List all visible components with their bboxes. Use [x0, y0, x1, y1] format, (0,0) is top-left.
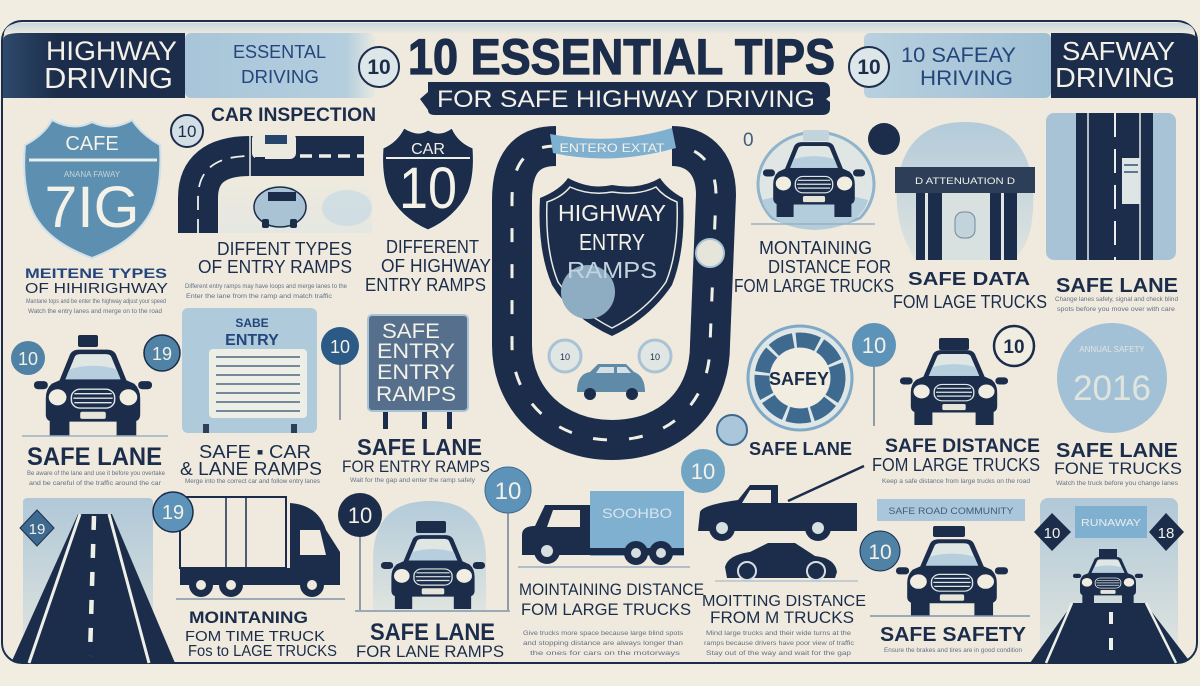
label: safe safety [880, 624, 1027, 654]
badge: right of car [144, 335, 180, 371]
label: different of highway: DIFFERENT [386, 237, 479, 257]
label: safe distance: SAFE DISTANCE [885, 436, 1040, 457]
small badge [717, 415, 747, 445]
label: safe safety: Ensure the brakes and tires are in good condition [884, 647, 1022, 654]
label: safe lane: Be aware of the lane and use it before you overtake [27, 470, 165, 477]
diamond marker [20, 510, 54, 546]
loop markers: 10 [650, 352, 660, 362]
smoke cloud [322, 190, 372, 226]
label: safe lane for entry ramps: SAFE LANE [357, 434, 482, 460]
label: moitting distance: Mind large trucks and their wide turns at the [706, 630, 851, 637]
label: maintaining distance: FOM LARGE TRUCKS [734, 276, 894, 296]
header: left light panel [185, 33, 375, 98]
badge: ringed 10: 10 [1003, 337, 1025, 358]
road sign: safe entry ramps: SAFE [382, 320, 440, 343]
arch with car [355, 501, 510, 611]
diamond 18: 18 [1158, 525, 1174, 542]
badge: left of car: 10 [18, 349, 38, 369]
badge: left of car [11, 341, 45, 375]
label: different types: OF ENTRY RAMPS [198, 257, 352, 277]
label: moitting distance: ramps because drivers have poor view of traffic [704, 640, 855, 647]
shield: route 7IG: 7IG [44, 175, 140, 240]
badge: blue 10 with pole: 10 [862, 333, 886, 358]
label: types of highway: Watch the entry lanes and merge on to the road [28, 308, 162, 315]
sedan [715, 543, 858, 581]
road panel: bottom right [1030, 498, 1191, 663]
banner: safety [877, 499, 1025, 521]
delivery truck: SOOHBO [602, 505, 672, 521]
heading: car inspection: CAR INSPECTION [211, 105, 376, 126]
label: safe lane top right: SAFE LANE [1056, 275, 1178, 297]
badge: 10 at pickup: 10 [691, 459, 715, 484]
badge: car inspection 10 [171, 115, 203, 147]
label: maintaining distance [734, 238, 894, 296]
car: safe distance [900, 338, 1008, 425]
car: safe lane [22, 335, 168, 436]
road panel: top right [1046, 113, 1176, 260]
label: safe lane top right [1055, 275, 1178, 313]
header: left dark block: DRIVING [44, 63, 173, 95]
header: top tint [4, 23, 1195, 34]
shield: route 7IG: ANANA FAWAY [64, 170, 121, 179]
header: left light panel: DRIVING [241, 67, 319, 87]
gate illustration: D ATTENUATION D [915, 176, 1016, 186]
badge: left 10: 10 [367, 56, 391, 79]
central shield: ENTRY [579, 229, 645, 255]
label: safe safety: SAFE SAFETY [880, 624, 1027, 646]
header: left dark block [3, 33, 185, 98]
label: maintaining distance: Give trucks more space because large blind spots [523, 630, 684, 637]
header: right light panel: 10 SAFEAY [901, 44, 1016, 67]
road sign: safe entry ramps: RAMPS [376, 383, 456, 406]
badge: blue 10 with pole: 10 [495, 478, 521, 505]
road panel: bottom right: RUNAWAY [1081, 518, 1141, 529]
label: maintaining distance: MOINTAINING DISTANCE [519, 580, 704, 599]
diamond 10: 10 [1044, 525, 1060, 542]
diamond 18 [1149, 513, 1184, 551]
label: safe lane for entry ramps: FOR ENTRY RAMPS [342, 457, 490, 476]
main looping road: ENTERO EXTAT [560, 141, 665, 155]
diamond 10 [1034, 513, 1071, 551]
road sign: safe entry ramps: ENTRY [377, 361, 455, 384]
label: maintaining distance: FOM LARGE TRUCKS [521, 600, 691, 619]
label: maintaining distance: the ones for cars on the motorways [530, 650, 681, 657]
badge: car inspection 10: 10 [178, 122, 196, 141]
panel: safe entry: SABE [235, 316, 269, 330]
label: maintaining for truck: FOM TIME TRUCK [185, 628, 325, 645]
label: moitting distance: MOITTING DISTANCE [702, 593, 866, 610]
label: different types: Different entry ramps may have loops and merge lanes to the [185, 283, 347, 290]
label: safe lane fone trucks: Watch the truck before you change lanes [1056, 480, 1179, 487]
label: maintaining distance [519, 580, 704, 657]
label: different types: Enter the lane from the ramp and match traffic [186, 293, 333, 300]
label: safe lane top right: Change lanes safely, signal and check blind [1055, 296, 1178, 303]
label: different of highway: ENTRY RAMPS [365, 275, 486, 295]
label: maintaining distance: DISTANCE FOR [768, 257, 891, 277]
road panel: bottom left [11, 498, 175, 663]
label: safe lane [27, 443, 165, 487]
title: 10 ESSENTIAL TIPS [408, 29, 835, 85]
label: safe data [893, 269, 1047, 312]
label: safe lane for lane ramps [356, 619, 504, 661]
panel: safe entry: ENTRY [225, 332, 279, 349]
small dark badge [868, 123, 900, 155]
truck [176, 497, 345, 599]
label: types of highway: MEITENE TYPES [25, 265, 167, 281]
label: safe lane for lane ramps: FOR LANE RAMPS [356, 642, 504, 661]
header: left light panel: ESSENTAL [233, 42, 326, 62]
badge: blue 10 with pole [852, 323, 896, 426]
label: safe lane fone trucks [1054, 440, 1182, 487]
big circle: 2016 [1057, 323, 1167, 433]
label: safe lane for entry ramps [342, 434, 490, 484]
label: safe data: SAFE DATA [908, 269, 1030, 289]
label: safe lane fone trucks: FONE TRUCKS [1054, 459, 1182, 478]
header: left dark block: HIGHWAY [46, 36, 177, 66]
shield: route 7IG [24, 120, 160, 258]
label: types of highway: OF HIHIRIGHWAY [25, 280, 168, 297]
badge: 10 at safety car [860, 531, 900, 571]
loop markers [549, 340, 671, 372]
big circle: 2016: 2016 [1073, 369, 1151, 408]
badge: left 10 [359, 47, 399, 87]
badge: ringed 10 [994, 326, 1034, 366]
label: safe distance [872, 436, 1040, 485]
road sign: safe entry ramps [368, 315, 468, 429]
badge: dark 10 with pole: 10 [348, 503, 372, 528]
badge: safety ring [748, 326, 852, 430]
label: safe distance: Keep a safe distance from large trucks on the road [882, 478, 1030, 485]
inspection circle [254, 187, 306, 228]
shield: car 10 [383, 128, 473, 230]
ramp illustration [198, 133, 372, 233]
label: safe car and lane ramps: Merge into the correct car and follow entry lanes [185, 478, 321, 485]
banner: safety: SAFE ROAD COMMUNITY [888, 506, 1014, 516]
loop markers: 10 [560, 352, 570, 362]
label: maintaining distance: MONTAINING [759, 238, 872, 258]
label: safe car and lane ramps: SAFE ▪ CAR [199, 442, 311, 462]
badge: 19: 19 [162, 502, 184, 524]
label: maintaining for truck: MOINTANING [189, 608, 308, 627]
shield: car 10: CAR [411, 141, 445, 158]
header: right dark block: DRIVING [1055, 62, 1175, 93]
label: safe data: FOM LAGE TRUCKS [893, 292, 1047, 312]
label: different types [185, 239, 352, 300]
label: safe lane fone trucks: SAFE LANE [1056, 440, 1178, 462]
badge: entry 10 with pole [321, 327, 359, 420]
central shield [540, 178, 684, 336]
main looping road [512, 128, 716, 440]
badge: safety ring: SAFEY [769, 369, 829, 389]
label: different of highway [365, 237, 491, 295]
label: types of highway [25, 265, 168, 315]
badge: dark 10 with pole [338, 493, 382, 610]
label: safe distance: FOM LARGE TRUCKS [872, 455, 1040, 475]
central shield: HIGHWAY [558, 200, 666, 226]
badge: right 10: 10 [857, 56, 881, 79]
badge: 19 [153, 492, 193, 532]
label: moitting distance: Stay out of the way and wait for the gap [706, 650, 851, 657]
label: safe lane top right: spots before you move over with care [1057, 306, 1175, 313]
central shield: RAMPS [567, 257, 657, 283]
small marker: 0: 0 [743, 130, 754, 151]
badge: entry 10 with pole: 10 [330, 337, 350, 357]
label: safe car and lane ramps [180, 442, 322, 485]
subtitle ribbon [420, 82, 830, 115]
car: safe safety [870, 526, 1030, 616]
big circle: 2016: ANNUAL SAFETY [1079, 345, 1145, 354]
label: maintaining distance: and stopping distance are always longer than [523, 640, 683, 647]
label: maintaining for truck [185, 608, 337, 660]
badge: right 10 [849, 47, 889, 87]
label: moitting distance [702, 593, 866, 657]
label: maintaining for truck: Fos to LAGE TRUCKS [188, 643, 337, 660]
gate illustration [895, 122, 1035, 260]
header: right dark block: SAFWAY [1062, 36, 1175, 66]
small car in loop [577, 364, 645, 400]
badge: 10 at safety car: 10 [868, 541, 892, 564]
shield: route 7IG: CAFE [65, 133, 119, 155]
label: safe lane middle: SAFE LANE [749, 439, 852, 459]
delivery truck [518, 491, 690, 567]
label: different types: DIFFENT TYPES [217, 239, 352, 259]
header: right light panel [864, 33, 1051, 98]
label: safe lane: SAFE LANE [27, 443, 162, 471]
shield: car 10: 10 [399, 156, 457, 221]
panel: safe entry [182, 308, 317, 433]
label: safe lane: and be careful of the traffic around the car [29, 480, 162, 487]
label: different of highway: OF HIGHWAY [381, 256, 491, 276]
header: right dark block [1051, 33, 1197, 98]
label: moitting distance: FROM M TRUCKS [710, 608, 854, 627]
label: safe lane for lane ramps: SAFE LANE [370, 619, 495, 646]
road marker [696, 239, 724, 267]
badge: blue 10 with pole [485, 467, 531, 610]
ramp car [252, 133, 296, 162]
label: safe lane for entry ramps: Wait for the gap and enter the ramp safely [350, 477, 476, 484]
pickup truck [698, 466, 864, 541]
header: right light panel: HRIVING [920, 67, 1013, 90]
badge: right of car: 19 [152, 344, 172, 364]
diamond marker: 19 [29, 521, 45, 538]
car in circle [751, 130, 875, 230]
badge: 10 at pickup [681, 449, 725, 493]
label: types of highway: Mantane tops and be enter the highway adjust your speed [26, 298, 166, 305]
subtitle ribbon: FOR SAFE HIGHWAY DRIVING [437, 86, 815, 113]
road sign: safe entry ramps: ENTRY [377, 340, 455, 363]
label: safe car and lane ramps: & LANE RAMPS [180, 459, 322, 479]
